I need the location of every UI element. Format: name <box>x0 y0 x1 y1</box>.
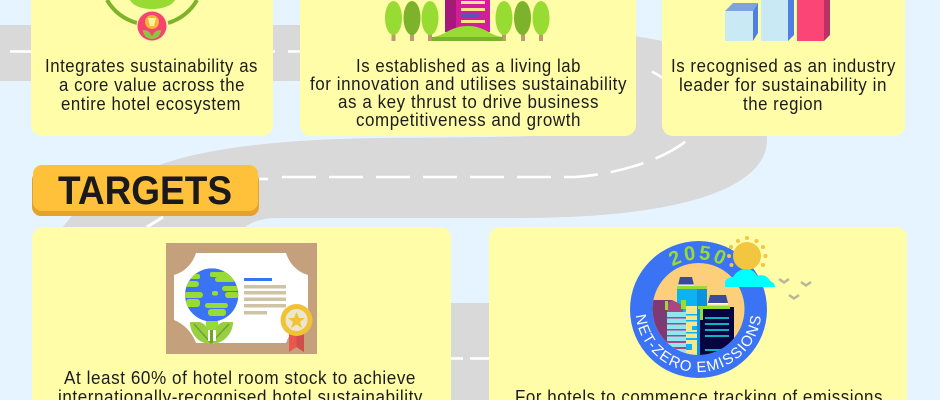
text: core value: Integrates sustainability as <box>45 56 258 76</box>
text: room stock target: At least 60% of hotel room stock to achieve <box>64 368 416 388</box>
icon: 3D bar chart <box>725 0 830 41</box>
heading: targets: TARGETS <box>58 169 232 213</box>
icon: 2050 net-zero emissions badge: 2050 <box>668 246 726 266</box>
panel: industry leader <box>662 0 905 136</box>
text: living lab: as a key thrust to drive business <box>338 92 599 112</box>
text: living lab <box>310 56 627 130</box>
panel: living lab <box>300 0 636 136</box>
winding road <box>0 25 767 400</box>
panel: room stock certification target <box>32 227 451 400</box>
icon: sun behind cloud <box>725 236 775 287</box>
text: industry leader <box>671 56 896 114</box>
text: living lab: for innovation and utilises sustainability <box>310 74 627 94</box>
text: industry leader: Is recognised as an industry <box>671 56 896 76</box>
panel: net-zero emissions target <box>489 227 907 400</box>
text: room stock target <box>58 368 423 400</box>
text: core value: entire hotel ecosystem <box>61 94 241 114</box>
text: living lab: competitiveness and growth <box>356 110 581 130</box>
text: industry leader: the region <box>743 94 823 114</box>
icon: sustainability certificate <box>166 243 317 354</box>
text: industry leader: leader for sustainability in <box>679 75 887 95</box>
panel: sustainability core value <box>31 0 273 136</box>
icon: 2050 net-zero emissions badge <box>630 236 812 378</box>
icon: green building among trees <box>385 0 550 41</box>
icon: 2050 net-zero emissions badge: NET-ZERO EMISSIONS <box>636 314 761 372</box>
text: core value <box>45 56 258 114</box>
icon: birds <box>779 279 811 298</box>
text: living lab: Is established as a living lab <box>356 56 581 76</box>
text: core value: a core value across the <box>59 75 245 95</box>
icon: green ring with lightbulb plant <box>107 0 197 42</box>
